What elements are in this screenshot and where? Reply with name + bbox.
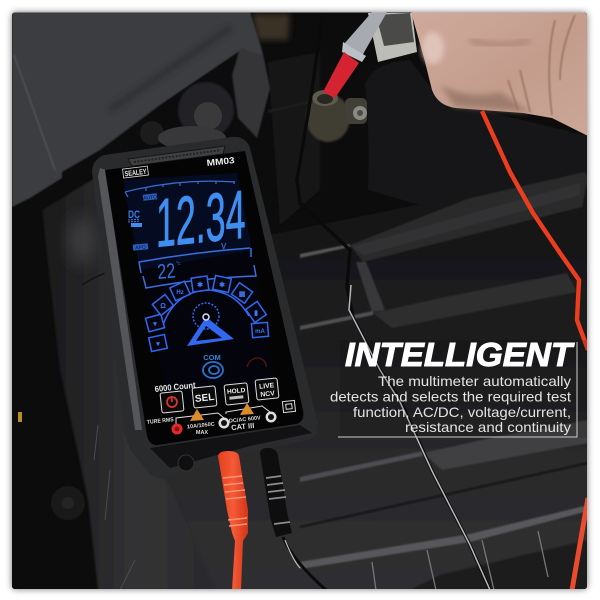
SEL button: SEL bbox=[194, 392, 215, 405]
hand bbox=[411, 12, 588, 136]
dial arc bbox=[163, 290, 249, 325]
description: The multimeter automatically bbox=[378, 374, 571, 389]
auto badge: AUTO bbox=[143, 194, 157, 202]
warning triangles bbox=[190, 403, 254, 421]
function tabs bbox=[145, 275, 269, 352]
jack white A bbox=[218, 418, 230, 428]
brand badge: SEALEY bbox=[124, 167, 147, 178]
red lead lower right bbox=[572, 498, 588, 590]
barcode label bbox=[368, 13, 417, 62]
description: function, AC/DC, voltage/current, bbox=[353, 405, 571, 420]
true RMS label: TURE RMS bbox=[147, 417, 174, 426]
current rating bbox=[187, 422, 215, 436]
engine cover bbox=[130, 14, 588, 590]
fabric cover bbox=[12, 12, 270, 207]
temperature box: 22 bbox=[156, 259, 176, 284]
SEL button bbox=[192, 386, 217, 408]
gear ring bbox=[193, 303, 219, 329]
multimeter bbox=[92, 137, 318, 479]
yellow clip bbox=[18, 412, 22, 422]
voltage rating bbox=[229, 415, 261, 432]
LIVE NCV button: LIVE bbox=[259, 382, 275, 391]
lower left fins bbox=[94, 425, 135, 590]
tab labels: ▮ bbox=[254, 310, 258, 317]
minus sign bbox=[131, 223, 142, 227]
red lead plug bbox=[218, 451, 248, 590]
description bbox=[330, 374, 571, 435]
DC indicator: DC bbox=[128, 209, 140, 221]
APO badge: APO bbox=[135, 244, 146, 251]
cover ridges bbox=[300, 172, 588, 590]
temperature box bbox=[139, 248, 256, 288]
current rating: 10A/1050C bbox=[187, 422, 215, 430]
black lead with highlight bbox=[297, 12, 490, 590]
APO badge bbox=[133, 243, 148, 252]
tab labels: ✱ bbox=[219, 281, 225, 289]
tab labels: ▾ bbox=[155, 341, 160, 348]
screen panel bbox=[123, 173, 277, 405]
temperature box: °c bbox=[176, 261, 181, 267]
tab labels: ▾ bbox=[152, 321, 157, 328]
tab labels: ▦ bbox=[239, 291, 246, 298]
COM touch ring bbox=[203, 362, 223, 378]
heading: INTELLIGENT bbox=[345, 336, 575, 373]
bar scale bbox=[125, 181, 235, 197]
description: resistance and continuity bbox=[405, 420, 571, 435]
voltage rating: DC/AC 600V bbox=[229, 415, 261, 425]
rubber bumper bbox=[92, 137, 318, 479]
LIVE NCV button bbox=[255, 378, 279, 400]
test probe bbox=[323, 12, 387, 98]
HOLD button: HOLD bbox=[227, 387, 246, 396]
caption dim bbox=[340, 340, 588, 438]
caption frame bbox=[338, 342, 577, 437]
jack circuit lines bbox=[176, 406, 270, 424]
function dial bbox=[145, 275, 269, 352]
double insulation mark bbox=[282, 400, 295, 413]
grille bbox=[128, 146, 225, 166]
count label: 6000 Count bbox=[154, 380, 196, 394]
bolt under fabric bbox=[140, 82, 234, 150]
left bolt bbox=[51, 486, 85, 520]
power button bbox=[160, 391, 184, 413]
black foam block bbox=[365, 60, 588, 205]
COM label: COM bbox=[203, 353, 221, 362]
model name: MM03 bbox=[206, 155, 235, 168]
triangle bbox=[187, 317, 234, 346]
jack red bbox=[172, 424, 182, 434]
rounded cover form left of meter bbox=[42, 178, 215, 590]
tab labels: Hz bbox=[176, 290, 184, 296]
terminal post bbox=[306, 90, 367, 142]
main reading: 12.34 bbox=[156, 176, 246, 262]
HOLD button bbox=[224, 383, 249, 405]
voltage rating: CAT III bbox=[231, 421, 255, 432]
tab labels: ✱ bbox=[197, 281, 203, 289]
description: detects and selects the required test bbox=[330, 390, 571, 404]
tab labels: Ω bbox=[160, 303, 166, 310]
LIVE NCV button: NCV bbox=[260, 390, 276, 399]
current rating: MAX bbox=[196, 430, 208, 436]
red lead upper bbox=[482, 111, 588, 350]
tab labels bbox=[152, 281, 265, 348]
side socket bbox=[178, 455, 194, 471]
black face bbox=[105, 151, 303, 445]
black lead plug bbox=[260, 448, 326, 590]
unit V: V bbox=[221, 242, 227, 251]
fins bbox=[372, 531, 548, 590]
tab labels: mA bbox=[255, 329, 265, 335]
caption bbox=[330, 336, 577, 437]
red touch ring bbox=[247, 358, 266, 367]
jack white B bbox=[266, 412, 276, 422]
